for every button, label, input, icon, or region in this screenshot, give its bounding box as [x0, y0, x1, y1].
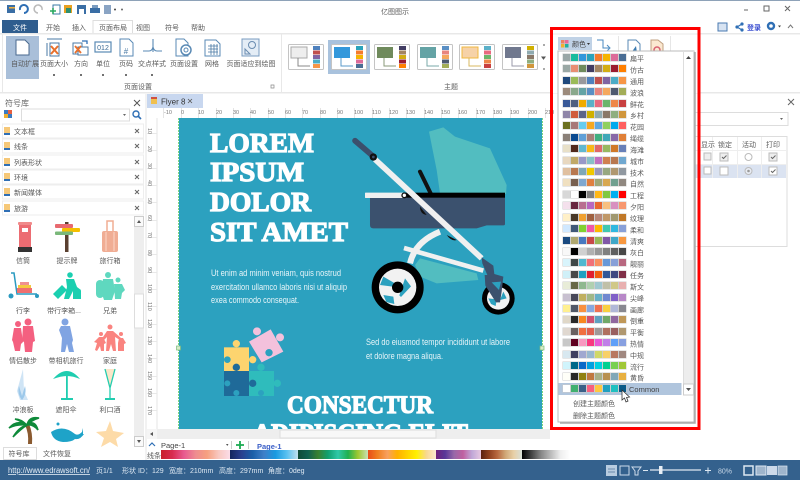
library category list [2, 124, 144, 215]
teal piece [249, 364, 281, 396]
zoom controls [606, 465, 787, 476]
flyer page [176, 118, 544, 447]
page tabs: Page-1 [161, 441, 185, 450]
top ruler: 140 [424, 110, 433, 116]
library category list: 列表形状 [14, 158, 42, 167]
top ruler: 30 [233, 110, 239, 116]
theme names: Common [629, 385, 659, 394]
left ruler: 20 [146, 146, 152, 152]
label: 情侣散步 [9, 356, 37, 365]
icon: traveller with camera [59, 318, 74, 352]
theme names: 黄昏 [630, 374, 644, 382]
status bar: 高度：297mm [219, 466, 264, 475]
symbol library panel [0, 94, 146, 460]
icon: starfish [96, 421, 124, 447]
layers panel: 打印 [766, 140, 780, 149]
library category list: 旅游 [14, 204, 28, 213]
front fork [482, 257, 503, 302]
large wheel [372, 261, 424, 313]
menu tabs: 符号 [165, 23, 179, 32]
flyer body text: exea commodo consequat. [211, 295, 299, 305]
label: 旅行箱 [100, 256, 120, 265]
account toolbar [718, 22, 793, 32]
left ruler: 120 [146, 319, 152, 328]
page number button: 页码 [119, 60, 133, 68]
theme names: 倒重 [630, 316, 644, 326]
theme names: 海滩 [630, 146, 644, 154]
top ruler: 60 [285, 110, 291, 116]
zoom controls: 80% [718, 468, 732, 476]
left ruler: 150 [146, 371, 152, 380]
bottom horizontal scrollbar [147, 429, 550, 439]
mouse cursor [622, 390, 630, 402]
theme names: 工程 [630, 191, 644, 200]
theme names: 靓丽 [630, 260, 644, 268]
red highlight rectangle [552, 28, 699, 428]
document tab [147, 94, 203, 108]
top ruler: 70 [302, 110, 308, 116]
page tabs: Page-1 [257, 442, 282, 451]
unit button: 单位 [96, 59, 110, 68]
flyer body text: Ut enim ad minim veniam, quis nostrud [211, 268, 341, 278]
theme names: 波浪 [630, 88, 644, 98]
top ruler: 190 [510, 110, 519, 116]
bassinet [370, 197, 505, 228]
window controls [744, 6, 790, 11]
unit button: 012 [97, 45, 109, 52]
flyer title: LOREM [210, 128, 314, 158]
left ruler: 70 [146, 232, 152, 238]
theme names: 清爽 [630, 237, 644, 246]
label: 信筒 [16, 256, 30, 265]
document tab: Flyer 8 [161, 98, 186, 106]
symbol scrollbar [134, 216, 144, 446]
icon: mailbox [18, 222, 32, 252]
left ruler: 110 [146, 302, 152, 311]
library category list: 新闻媒体 [14, 188, 42, 197]
stroller hood [429, 127, 507, 194]
left ruler: 80 [146, 250, 152, 256]
page size button: 页面大小 [40, 59, 68, 68]
left ruler: 50 [146, 198, 152, 204]
account toolbar: 登录 [747, 23, 761, 32]
status bar: 页1/1 [96, 467, 113, 475]
label: 带相机旅行 [48, 356, 84, 365]
fit page button: 页面适应到绘图 [226, 59, 276, 68]
theme names: 城市 [630, 157, 644, 166]
top ruler: 150 [441, 110, 450, 116]
symbol library panel: 符号库 [5, 98, 29, 108]
theme group label: 主题 [444, 82, 458, 91]
menu tabs: 视图 [136, 23, 150, 32]
flyer title [210, 128, 348, 247]
line label: 线条 [147, 451, 161, 460]
theme names: 仿古 [630, 66, 644, 74]
left ruler: 10 [146, 128, 152, 134]
icon: traveller with suitcase [53, 272, 81, 299]
flyer title: SIT AMET [210, 217, 348, 247]
auto extend button: 自动扩展 [11, 59, 39, 68]
flyer title: DOLOR [210, 187, 312, 217]
theme names: 技术 [630, 168, 644, 178]
layers panel: 显示 [701, 141, 715, 149]
pink piece [249, 327, 284, 362]
icon: palm tree [9, 418, 39, 444]
library category list: 文本框 [14, 127, 35, 136]
grid button: 网格 [205, 59, 219, 68]
theme gallery [288, 40, 545, 74]
left ruler: 40 [146, 180, 152, 186]
menu tabs [2, 20, 205, 34]
bottom panel tabs: 文件恢复 [43, 449, 71, 458]
page setup button: 页面设置 [170, 59, 198, 68]
menu tabs: 开始 [46, 23, 60, 32]
flyer body text [211, 268, 347, 305]
menu tabs: 文件 [13, 23, 27, 32]
navy piece [224, 364, 256, 396]
flyer subtitle: CONSECTUR [287, 392, 434, 419]
top ruler: 90 [337, 110, 343, 116]
label: 行李 [16, 306, 30, 315]
bottom panel tabs: 符号库 [8, 449, 30, 458]
theme names: 平衡 [630, 328, 644, 337]
theme names: 中规 [630, 351, 644, 360]
status bar: 角度：0deg [268, 466, 305, 475]
left ruler: 30 [146, 163, 152, 169]
top ruler: 180 [493, 110, 502, 116]
theme names: 通用 [630, 77, 644, 86]
fit page button [226, 39, 276, 68]
top ruler: 200 [528, 110, 537, 116]
icon: brothers [96, 272, 125, 300]
label: 提示牌 [56, 256, 78, 265]
icon: family [94, 324, 126, 351]
handle [355, 141, 372, 155]
status bar: 形状 ID：129 [122, 466, 164, 475]
flyer title: IPSUM [210, 157, 304, 187]
junction style button [138, 39, 166, 76]
orientation button: 方向 [74, 59, 88, 68]
theme names: 流行 [630, 362, 644, 372]
icon: luggage cart [8, 273, 39, 298]
left ruler: 140 [146, 354, 152, 363]
left ruler: 130 [146, 336, 152, 345]
status bar: http://www.edrawsoft.cn/ [8, 466, 91, 475]
theme names: 热情 [630, 340, 644, 348]
theme names: 鲜花 [630, 100, 644, 109]
theme names [629, 54, 659, 394]
top ruler: -10 [164, 110, 172, 116]
page tabs [149, 441, 282, 451]
flyer subtitle [253, 392, 468, 447]
layers panel: 活动 [742, 140, 756, 149]
color theme dropdown [558, 51, 695, 423]
layers panel [690, 93, 800, 246]
icon: couple walking [12, 318, 35, 352]
frame [410, 232, 440, 263]
label: 家庭 [103, 356, 117, 365]
flyer second text: et dolore magna aliqua. [366, 351, 443, 361]
palette swatches [562, 54, 626, 392]
unit button [95, 42, 111, 76]
top ruler [147, 108, 554, 118]
status bar [0, 460, 800, 480]
flyer subtitle: ADIPISCING ELIT [253, 420, 468, 447]
top ruler: 80 [320, 110, 326, 116]
icon: signpost [55, 222, 80, 252]
page setup button [170, 39, 198, 68]
label: 利口酒 [100, 405, 120, 414]
theme names: 画廊 [630, 306, 644, 314]
lower basket [415, 258, 478, 283]
icon: liqueur glass [105, 369, 115, 400]
page size button [40, 39, 68, 76]
left ruler: 170 [146, 406, 152, 415]
theme names: 尖峰 [630, 294, 644, 303]
top ruler: 0 [181, 110, 184, 116]
label: 遮阳伞 [56, 405, 76, 414]
top ruler: 110 [372, 110, 381, 116]
status bar: 宽度：210mm [169, 466, 214, 475]
label: 带行李箱... [47, 306, 81, 315]
top ruler: 120 [389, 110, 398, 116]
theme names: 斯文 [630, 282, 644, 292]
theme names: 自然 [630, 180, 644, 188]
small wheel [482, 282, 515, 315]
left ruler: 100 [146, 284, 152, 293]
theme names: 纹理 [630, 214, 644, 223]
ribbon [0, 33, 800, 94]
yellow piece [224, 340, 256, 371]
left ruler: 60 [146, 215, 152, 221]
color strip [161, 450, 566, 459]
top ruler: 170 [476, 110, 485, 116]
theme names: 扁平 [630, 54, 644, 63]
stroller illustration [355, 127, 515, 315]
library category list: 线条 [14, 142, 28, 151]
delete theme color: 删除主题颜色 [573, 411, 615, 420]
theme names: 花园 [630, 122, 644, 132]
flyer body text: exercitation ullamco laboris nisi ut aliquip [211, 282, 347, 292]
top ruler: 10 [198, 110, 204, 116]
icon: whale [51, 422, 84, 442]
selected row highlight [558, 383, 682, 395]
window title: 亿图图示 [381, 7, 409, 16]
top ruler: 130 [406, 110, 415, 116]
left ruler [146, 118, 158, 429]
icon: beach umbrella [53, 371, 80, 400]
color button row: 颜色 [572, 40, 586, 48]
menu tabs: 插入 [72, 23, 86, 32]
left ruler: 160 [146, 388, 152, 397]
top ruler: 160 [458, 110, 467, 116]
orientation button [73, 41, 88, 76]
left ruler: 90 [146, 267, 152, 273]
bottom panel tabs [4, 448, 71, 460]
junction style button: 交点样式 [138, 59, 166, 68]
grid button [205, 40, 220, 68]
library category list: 环境 [14, 173, 28, 182]
create theme color: 创建主题颜色 [573, 399, 615, 408]
auto extend button [6, 36, 39, 79]
color button row [551, 33, 698, 93]
dropdown scrollbar [684, 52, 694, 395]
flyer second text [366, 337, 510, 361]
puzzle illustration [224, 327, 284, 396]
layers panel: 锁定 [718, 140, 732, 149]
top ruler: 210 [545, 110, 554, 116]
label: 冲浪板 [12, 405, 34, 414]
flyer second text: Sed do eiusmod tempor incididunt ut labore [366, 337, 510, 347]
top ruler: 20 [216, 110, 222, 116]
menu tabs: 帮助 [191, 23, 205, 32]
top ruler: 40 [250, 110, 256, 116]
icon: suitcase [102, 221, 118, 252]
theme names: 乡村 [630, 111, 644, 120]
theme names: 柔和 [630, 226, 644, 234]
icon: surfboard [17, 369, 28, 400]
theme names: 夕阳 [630, 202, 644, 212]
label: 兄弟 [103, 306, 117, 315]
page setup group label: 页面设置 [124, 82, 152, 91]
quick access toolbar [7, 5, 123, 14]
theme names: 灰白 [630, 248, 644, 257]
theme names: 任务 [630, 271, 644, 280]
theme names: 绳缆 [630, 134, 644, 143]
top ruler: 100 [354, 110, 363, 116]
menu tabs: 页面布局 [99, 23, 127, 32]
page number button [119, 39, 133, 76]
page number button: # [124, 47, 129, 56]
top ruler: 50 [268, 110, 274, 116]
